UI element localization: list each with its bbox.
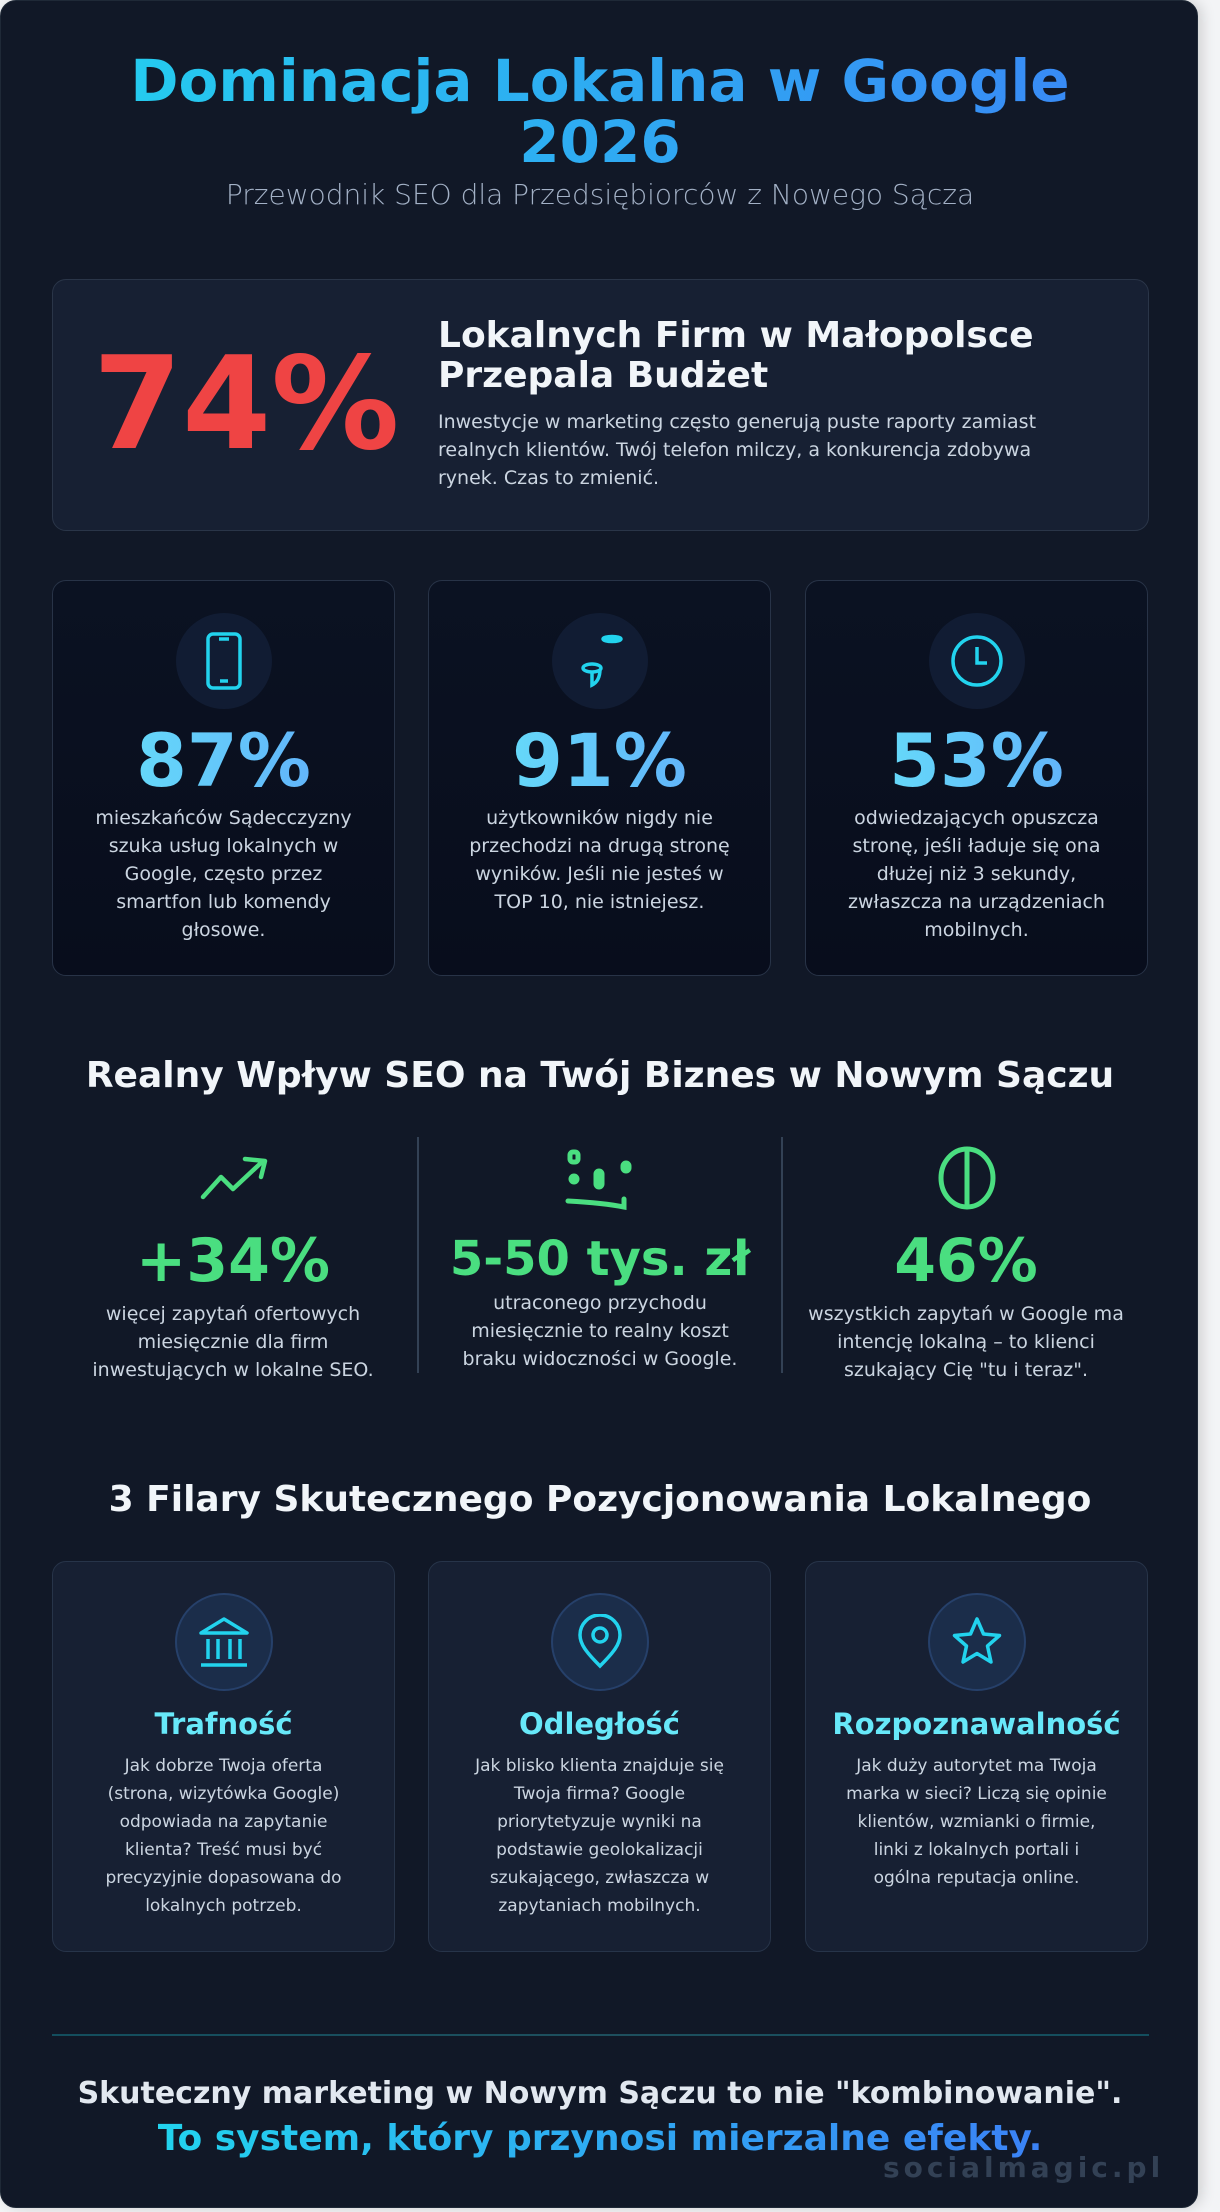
number: +34% xyxy=(136,1226,330,1296)
stat card: 91% xyxy=(428,580,771,976)
text: wszystkich zapytań w Google ma intencję lokalną – to klienci szukający Cię "tu i teraz". xyxy=(808,1303,1124,1381)
number: 91% xyxy=(512,719,687,804)
icon: phone xyxy=(176,613,272,709)
text: więcej zapytań ofertowych miesięcznie dla firm inwestujących w lokalne SEO. xyxy=(92,1303,374,1381)
icon: search xyxy=(552,613,648,709)
icon: building xyxy=(174,1593,272,1691)
hero text: Inwestycje w marketing często generują puste raporty zamiast realnych klientów. Twój telefon milczy, a konkurencja zdobywa rynek. Czas to zmienić. xyxy=(438,411,1036,489)
number xyxy=(806,722,1147,802)
impact: +34% xyxy=(92,1156,374,1381)
title xyxy=(1,51,1199,173)
impact: 5-50 tys. zł xyxy=(450,1150,751,1370)
section heading: pillars: 3 Filary Skutecznego Pozycjonowania Lokalnego xyxy=(109,1479,1091,1520)
title: Trafność xyxy=(154,1707,293,1741)
text: mieszkańców Sądecczyzny szuka usług lokalnych w Google, często przez smartfon lub komendy głosowe. xyxy=(95,807,352,941)
title: Odległość xyxy=(519,1707,680,1741)
title: 2026 xyxy=(519,108,681,176)
divider xyxy=(52,2034,1149,2036)
pillar: Odległość xyxy=(428,1561,771,1952)
text: odwiedzających opuszcza stronę, jeśli ładuje się ona dłużej niż 3 sekundy, zwłaszcza na urządzeniach mobilnych. xyxy=(848,807,1105,941)
text: użytkowników nigdy nie przechodzi na drugą stronę wyników. Jeśli nie jesteś w TOP 10, nie istniejesz. xyxy=(469,807,730,913)
number: 53% xyxy=(889,719,1064,804)
title: Dominacja Lokalna w Google xyxy=(130,47,1070,115)
watermark: socialmagic.pl xyxy=(883,2151,1164,2184)
hero panel xyxy=(52,279,1149,531)
icon: money xyxy=(566,1150,632,1210)
text: Jak blisko klienta znajduje się Twoja firma? Google priorytetyzuje wyniki na podstawie geolokalizacji szukającego, zwłaszcza w zapytaniach mobilnych. xyxy=(475,1756,724,1916)
pillar: Rozpoznawalność xyxy=(805,1561,1148,1952)
stat card: 87% xyxy=(52,580,395,976)
number: 46% xyxy=(894,1226,1038,1296)
section heading: impact: Realny Wpływ SEO na Twój Biznes w Nowym Sączu xyxy=(86,1055,1114,1096)
footer tagline: To system, który przynosi mierzalne efekty. xyxy=(158,2118,1042,2159)
number xyxy=(429,722,770,802)
hero number: 74% xyxy=(93,330,399,479)
number: 5-50 tys. zł xyxy=(450,1231,750,1287)
number xyxy=(53,722,394,802)
text: utraconego przychodu miesięcznie to realny koszt braku widoczności w Google. xyxy=(463,1292,737,1370)
impact: 46% xyxy=(808,1146,1124,1381)
stat card: 53% xyxy=(805,580,1148,976)
number: 87% xyxy=(136,719,311,804)
subtitle: Przewodnik SEO dla Przedsiębiorców z Nowego Sącza xyxy=(226,178,974,211)
icon: star xyxy=(928,1593,1026,1691)
pillar: Trafność xyxy=(52,1561,395,1952)
icon: globe xyxy=(938,1146,996,1210)
hero heading: Lokalnych Firm w Małopolsce xyxy=(438,315,1034,356)
title: Rozpoznawalność xyxy=(832,1707,1121,1741)
icon: trend up xyxy=(200,1156,268,1200)
icon: clock xyxy=(928,613,1024,709)
text: Jak duży autorytet ma Twoja marka w sieci? Liczą się opinie klientów, wzmianki o firmie, linki z lokalnych portali i ogólna reputacja online. xyxy=(846,1756,1107,1888)
hero heading: Przepala Budżet xyxy=(438,355,768,396)
hero heading xyxy=(438,315,1034,396)
text: Jak dobrze Twoja oferta (strona, wizytówka Google) odpowiada na zapytanie klienta? Treść musi być precyzyjnie dopasowana do lokalnych potrzeb. xyxy=(105,1756,342,1916)
footer statement: Skuteczny marketing w Nowym Sączu to nie "kombinowanie". xyxy=(78,2076,1122,2111)
icon: pin xyxy=(550,1593,648,1691)
divider xyxy=(417,1137,419,1373)
